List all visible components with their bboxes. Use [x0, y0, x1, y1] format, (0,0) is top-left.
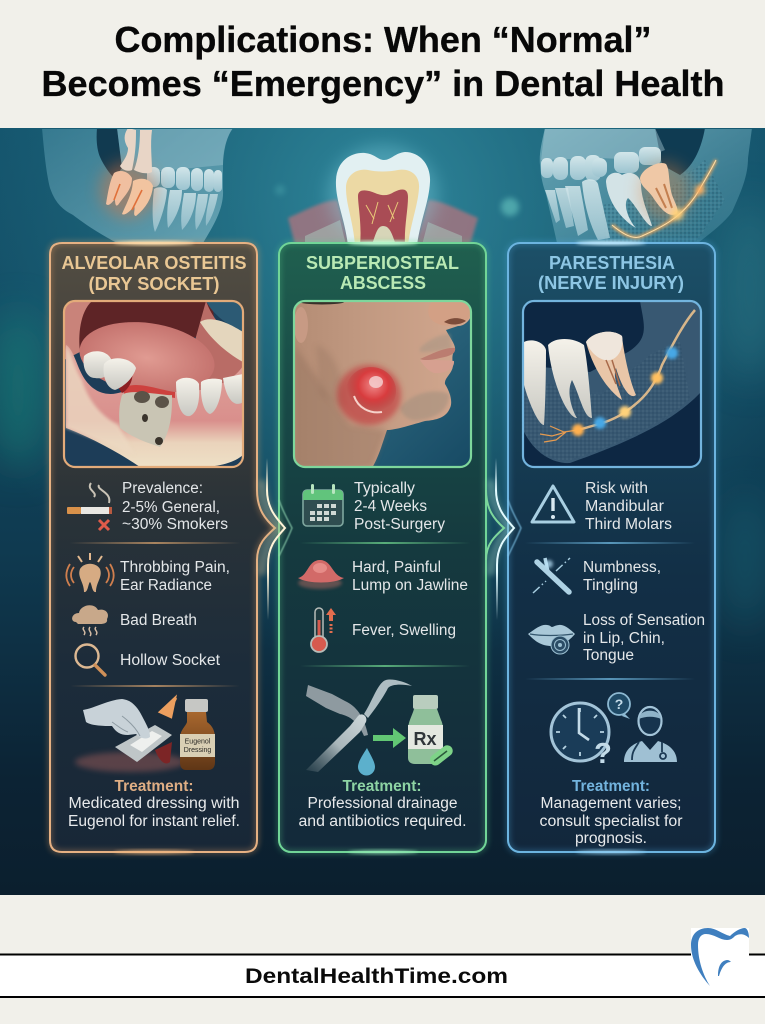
text: treatment: Treatment:	[114, 778, 194, 795]
illustration: central tooth cross section	[288, 145, 478, 245]
heading: abscess	[306, 252, 459, 293]
illustration: medicated dressing	[75, 698, 215, 772]
text: treatment: Management varies;	[540, 795, 682, 812]
text: timing: 2-4 Weeks	[354, 498, 427, 515]
text: timing: Post-Surgery	[354, 516, 445, 533]
icon: throbbing tooth	[66, 553, 114, 592]
icon: magnifier	[76, 644, 105, 675]
footer website: DentalHealthTime.com	[245, 965, 508, 988]
text: throbbing pain	[120, 559, 230, 594]
text: risk: Mandibular	[585, 498, 664, 515]
footer	[0, 954, 765, 998]
text: risk: Risk with	[585, 480, 648, 497]
text: treatment: Medicated dressing with	[68, 795, 240, 812]
text: treatment: Eugenol for instant relief.	[68, 813, 240, 830]
text: treatment: and antibiotics required.	[298, 813, 466, 830]
text: lump	[352, 559, 468, 594]
heading: abscess: SUBPERIOSTEAL	[306, 252, 459, 273]
text: sensation loss: Tongue	[583, 647, 634, 664]
icon: nerve tingling	[533, 558, 570, 593]
text: lump: Hard, Painful	[352, 559, 441, 576]
illustration: clock and doctor: ?	[594, 738, 612, 770]
title: Becomes “Emergency” in Dental Health	[42, 63, 724, 104]
text: numbness: Tingling	[583, 577, 638, 594]
panel: subperiosteal abscess	[279, 241, 486, 854]
icon: bad breath cloud	[72, 605, 108, 636]
text: sensation loss: Loss of Sensation	[583, 612, 705, 629]
text: prevalence: ~30% Smokers	[122, 516, 228, 533]
text: bad breath: Bad Breath	[120, 612, 197, 629]
illustration: left skull with glowing molars	[42, 128, 233, 243]
text: treatment: Treatment:	[572, 778, 650, 795]
text: treatment: Professional drainage	[308, 795, 458, 812]
text: treatment	[298, 778, 466, 830]
heading: nerve injury: PARESTHESIA	[549, 252, 675, 273]
photo: dry socket jaw	[64, 301, 243, 467]
icon: cigarette	[67, 483, 112, 530]
text: throbbing pain: Ear Radiance	[120, 577, 212, 594]
illustration: drainage and antibiotics	[306, 679, 455, 776]
text: sensation loss	[583, 612, 705, 664]
heading: nerve injury	[538, 252, 684, 293]
heading: nerve injury: (NERVE INJURY)	[538, 272, 684, 293]
text: treatment: consult specialist for	[540, 813, 682, 830]
icon: lips	[528, 625, 575, 654]
illustration: right skull with nerve	[540, 128, 752, 243]
text: prevalence	[122, 480, 228, 533]
icon: calendar	[303, 484, 343, 526]
icon: lump	[298, 560, 344, 589]
text: timing: Typically	[354, 480, 415, 497]
text: treatment: Treatment:	[342, 778, 422, 795]
heading: abscess: ABSCESS	[340, 272, 426, 293]
text: throbbing pain: Throbbing Pain,	[120, 559, 230, 576]
text: treatment	[68, 778, 240, 830]
text: treatment	[540, 778, 682, 847]
text: risk	[585, 480, 672, 533]
connector: arrow from dry socket panel into abscess panel	[262, 458, 292, 620]
text: hollow socket: Hollow Socket	[120, 652, 221, 669]
panel: paresthesia	[508, 241, 715, 854]
illustration: medicated dressing: Dressing	[184, 747, 211, 754]
connector: arrow from abscess panel into paresthesia panel	[486, 458, 521, 620]
text: numbness: Numbness,	[583, 559, 661, 576]
text: prevalence: Prevalence:	[122, 480, 203, 497]
illustration: drainage and antibiotics: Rx	[413, 729, 437, 749]
heading: dry socket: (DRY SOCKET)	[88, 273, 220, 294]
panel: alveolar osteitis	[50, 241, 275, 854]
title	[42, 19, 724, 104]
text: sensation loss: in Lip, Chin,	[583, 630, 665, 647]
infographic background	[0, 128, 765, 895]
text: numbness	[583, 559, 661, 594]
photo: nerve and molars	[523, 301, 701, 467]
text: lump: Lump on Jawline	[352, 577, 468, 594]
text: risk: Third Molars	[585, 516, 672, 533]
text: treatment: prognosis.	[575, 830, 647, 847]
logo: tooth	[691, 928, 749, 987]
text: prevalence: 2-5% General,	[122, 499, 220, 516]
heading: dry socket	[62, 252, 246, 294]
photo: swollen jaw	[294, 300, 472, 468]
illustration: clock and doctor	[551, 693, 677, 770]
heading: dry socket: ALVEOLAR OSTEITIS	[62, 252, 246, 273]
illustration: medicated dressing: Eugenol	[185, 738, 211, 746]
icon: warning triangle	[532, 486, 574, 522]
text: fever: Fever, Swelling	[352, 622, 456, 639]
title: Complications: When “Normal”	[114, 19, 652, 60]
text: timing	[354, 480, 445, 533]
illustration: clock and doctor: ?	[615, 696, 623, 712]
icon: thermometer	[311, 608, 336, 652]
